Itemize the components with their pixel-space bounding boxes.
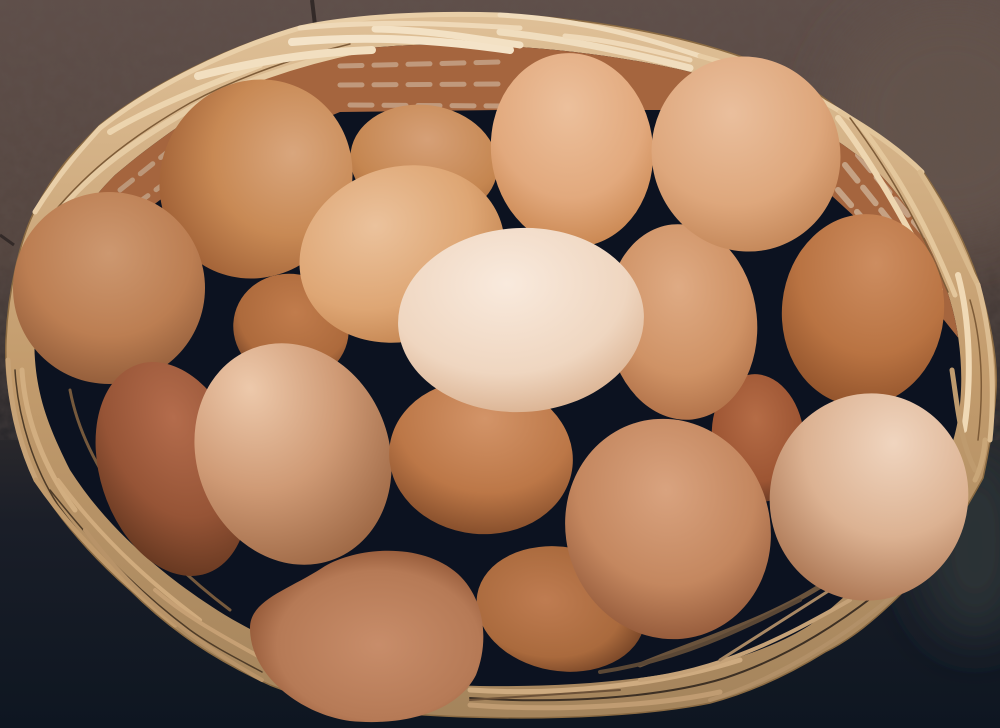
egg: upper middle	[276, 139, 528, 369]
egg: lower left pale	[162, 313, 424, 595]
egg: far left	[13, 192, 205, 384]
basket strands: top	[35, 14, 992, 480]
egg: top right	[624, 30, 868, 278]
egg: bottom	[250, 551, 483, 722]
egg: lower left dark	[70, 342, 274, 596]
egg: small speckled back right	[706, 370, 810, 506]
egg: top centre tall	[481, 45, 663, 255]
egg: lower right centre	[537, 392, 799, 666]
egg: lower right pale	[746, 371, 992, 623]
egg: centre pale	[393, 222, 649, 418]
egg: bottom centre back	[467, 533, 655, 685]
egg: lower centre	[381, 371, 581, 543]
egg: back top centre	[343, 95, 505, 229]
egg: far right dark	[772, 206, 954, 414]
egg: right of centre	[597, 217, 767, 427]
basket strands: bottom	[8, 360, 905, 708]
egg: top left	[123, 44, 389, 314]
egg: back small centre-left	[221, 261, 361, 395]
